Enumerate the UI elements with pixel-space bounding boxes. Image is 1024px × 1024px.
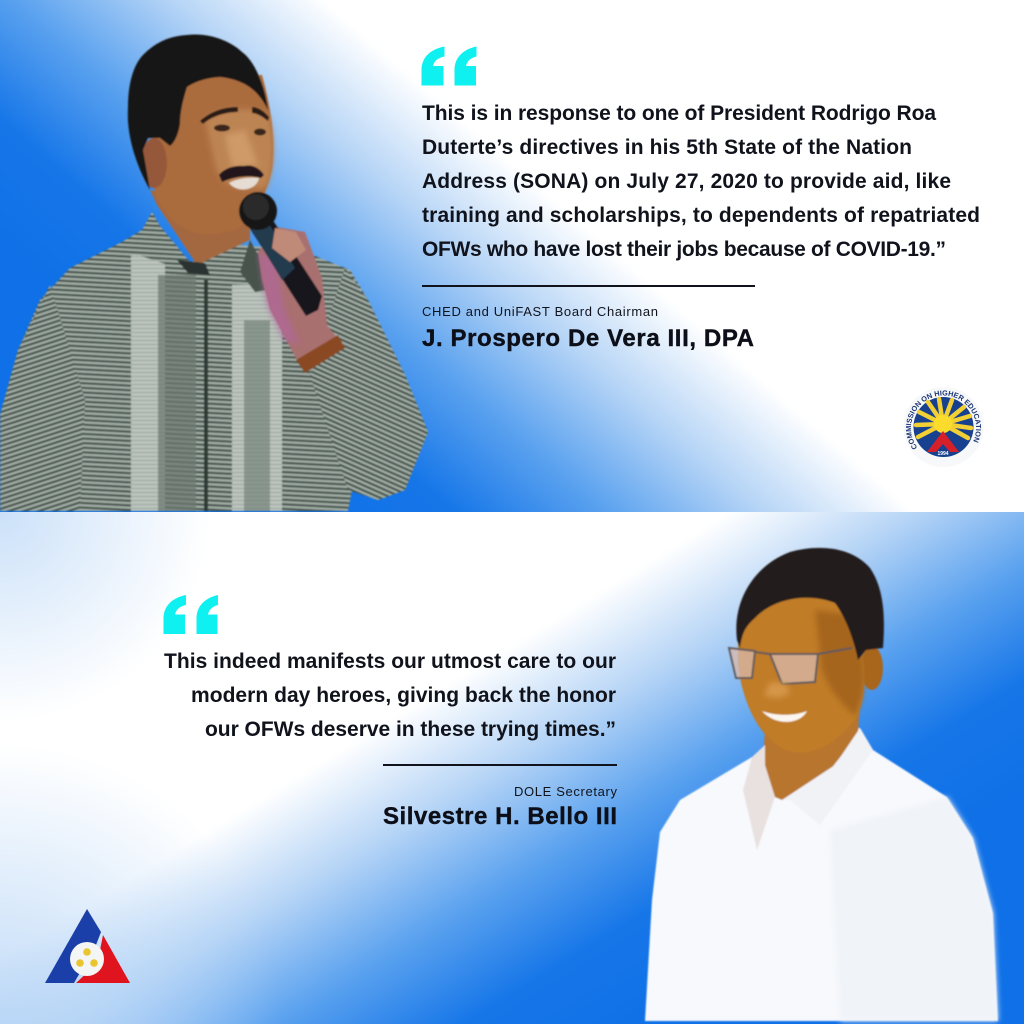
attribution: DOLE secretary: Silvestre H. Bello III <box>383 803 617 830</box>
white shirt <box>645 728 998 1021</box>
microphone <box>247 222 322 316</box>
eyebrows and eyes <box>200 107 269 124</box>
logo: Commission on Higher Education seal: 1994 <box>937 451 949 457</box>
hair <box>128 34 268 190</box>
hand <box>258 227 343 362</box>
photo: DOLE secretary portrait <box>645 548 998 1021</box>
text block: De Vera quote: OFWs who have lost their jobs because of COVID-19.” <box>422 238 946 261</box>
attribution: DOLE secretary <box>383 784 618 830</box>
shirt body <box>18 230 368 512</box>
nose <box>764 682 790 698</box>
ear <box>861 646 883 690</box>
attribution: CHED chairman: J. Prospero De Vera III, DPA <box>422 325 754 352</box>
text block: De Vera quote: Duterte’s directives in his 5th State of the Nation <box>422 136 912 159</box>
attribution: CHED chairman: CHED and UniFAST Board Chairman <box>422 304 658 319</box>
text block: Bello quote: our OFWs deserve in these trying times.” <box>205 718 616 741</box>
ear <box>141 138 167 188</box>
logo: Commission on Higher Education seal: COMMISSION ON HIGHER EDUCATION <box>906 390 982 450</box>
collar <box>141 212 190 268</box>
text block: Bello quote: modern day heroes, giving back the honor <box>191 684 616 707</box>
moustache and mouth <box>219 165 264 182</box>
seal sun rays <box>916 399 971 438</box>
logo stars <box>76 948 98 967</box>
hair <box>736 548 884 660</box>
logo: Department of Labor and Employment <box>45 909 130 983</box>
divider: bottom attribution <box>383 764 617 766</box>
text block: De Vera quote: This is in response to one of President Rodrigo Roa <box>422 102 936 125</box>
glasses <box>729 648 852 684</box>
panel: top quote background <box>0 0 1024 512</box>
watch <box>296 335 345 373</box>
seal red mountain <box>927 431 959 452</box>
neck <box>763 711 860 801</box>
panel: bottom quote background <box>0 512 1024 1024</box>
face <box>154 74 274 214</box>
photo: CHED chairman speaking into microphone <box>0 34 428 511</box>
text block: De Vera quote <box>422 102 980 261</box>
text block: Bello quote <box>164 650 616 741</box>
quote mark: bottom <box>164 595 218 634</box>
neck <box>150 190 250 265</box>
text block: Bello quote: This indeed manifests our utmost care to our <box>164 650 616 673</box>
attribution: DOLE secretary: DOLE Secretary <box>514 784 618 799</box>
fingers <box>272 228 306 262</box>
open collar <box>743 745 775 850</box>
barong embroidered panels <box>131 255 165 511</box>
text block: De Vera quote: Address (SONA) on July 27, 2020 to provide aid, like <box>422 170 951 193</box>
text block: De Vera quote: training and scholarships, to dependents of repatriated <box>422 204 980 227</box>
quote mark: top <box>422 46 476 86</box>
smile <box>762 711 807 722</box>
divider: top attribution <box>422 285 755 287</box>
face <box>736 596 866 736</box>
attribution: CHED chairman <box>422 304 754 352</box>
